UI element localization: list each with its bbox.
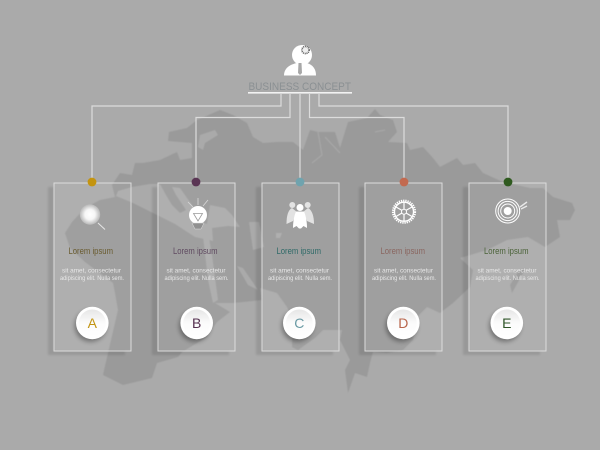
icon: gear wheel [393, 201, 415, 223]
seas [116, 184, 240, 241]
world map silhouette [65, 109, 575, 393]
card A letter button: A [88, 315, 98, 331]
connector dot A [88, 178, 96, 186]
connector dot C [296, 178, 304, 186]
card C description: sit amet, consectetur [270, 268, 329, 274]
card C heading: Lorem ipsum [276, 246, 321, 256]
card A description: adipiscing elit. Nulla sem. [60, 276, 124, 282]
icon: group of people [286, 202, 314, 228]
title: BUSINESS CONCEPT [248, 81, 351, 93]
card D description: adipiscing elit. Nulla sem. [372, 276, 436, 282]
card E description: sit amet, consectetur [478, 268, 536, 274]
connector dot B [192, 178, 200, 186]
panel: card D [359, 183, 442, 355]
title underline bar [248, 92, 352, 94]
connector lines [92, 94, 508, 182]
card D description: sit amet, consectetur [374, 268, 433, 274]
connector dot D [400, 178, 408, 186]
panel: card A [48, 183, 131, 355]
card A letter button [74, 307, 109, 342]
card A description: sit amet, consectetur [62, 268, 121, 274]
panel: card B [152, 183, 235, 355]
card D letter button [386, 307, 420, 342]
card C letter button [282, 307, 316, 342]
card E letter button: E [502, 315, 511, 331]
icon: magnifier ball [80, 204, 105, 230]
card E letter button [489, 307, 523, 342]
icon: business person with gear [284, 45, 316, 76]
connector dot E [504, 178, 512, 186]
icon: target with arrow [496, 199, 527, 223]
card C description: adipiscing elit. Nulla sem. [268, 276, 332, 282]
card B description: sit amet, consectetur [166, 268, 226, 274]
card B letter button [179, 307, 213, 342]
card A heading: Lorem ipsum [68, 246, 113, 256]
card E description: adipiscing elit. Nulla sem. [476, 276, 540, 282]
card D letter button: D [398, 315, 408, 331]
card E heading: Lorem ipsum [484, 246, 528, 256]
card C letter button: C [294, 315, 304, 331]
icon: light bulb [188, 198, 208, 229]
panel: card E [463, 183, 546, 355]
card B letter button: B [192, 315, 201, 331]
card D heading: Lorem ipsum [380, 246, 425, 256]
panel: card C [256, 183, 339, 355]
card B description: adipiscing elit. Nulla sem. [164, 276, 229, 282]
card B heading: Lorem ipsum [173, 246, 218, 256]
